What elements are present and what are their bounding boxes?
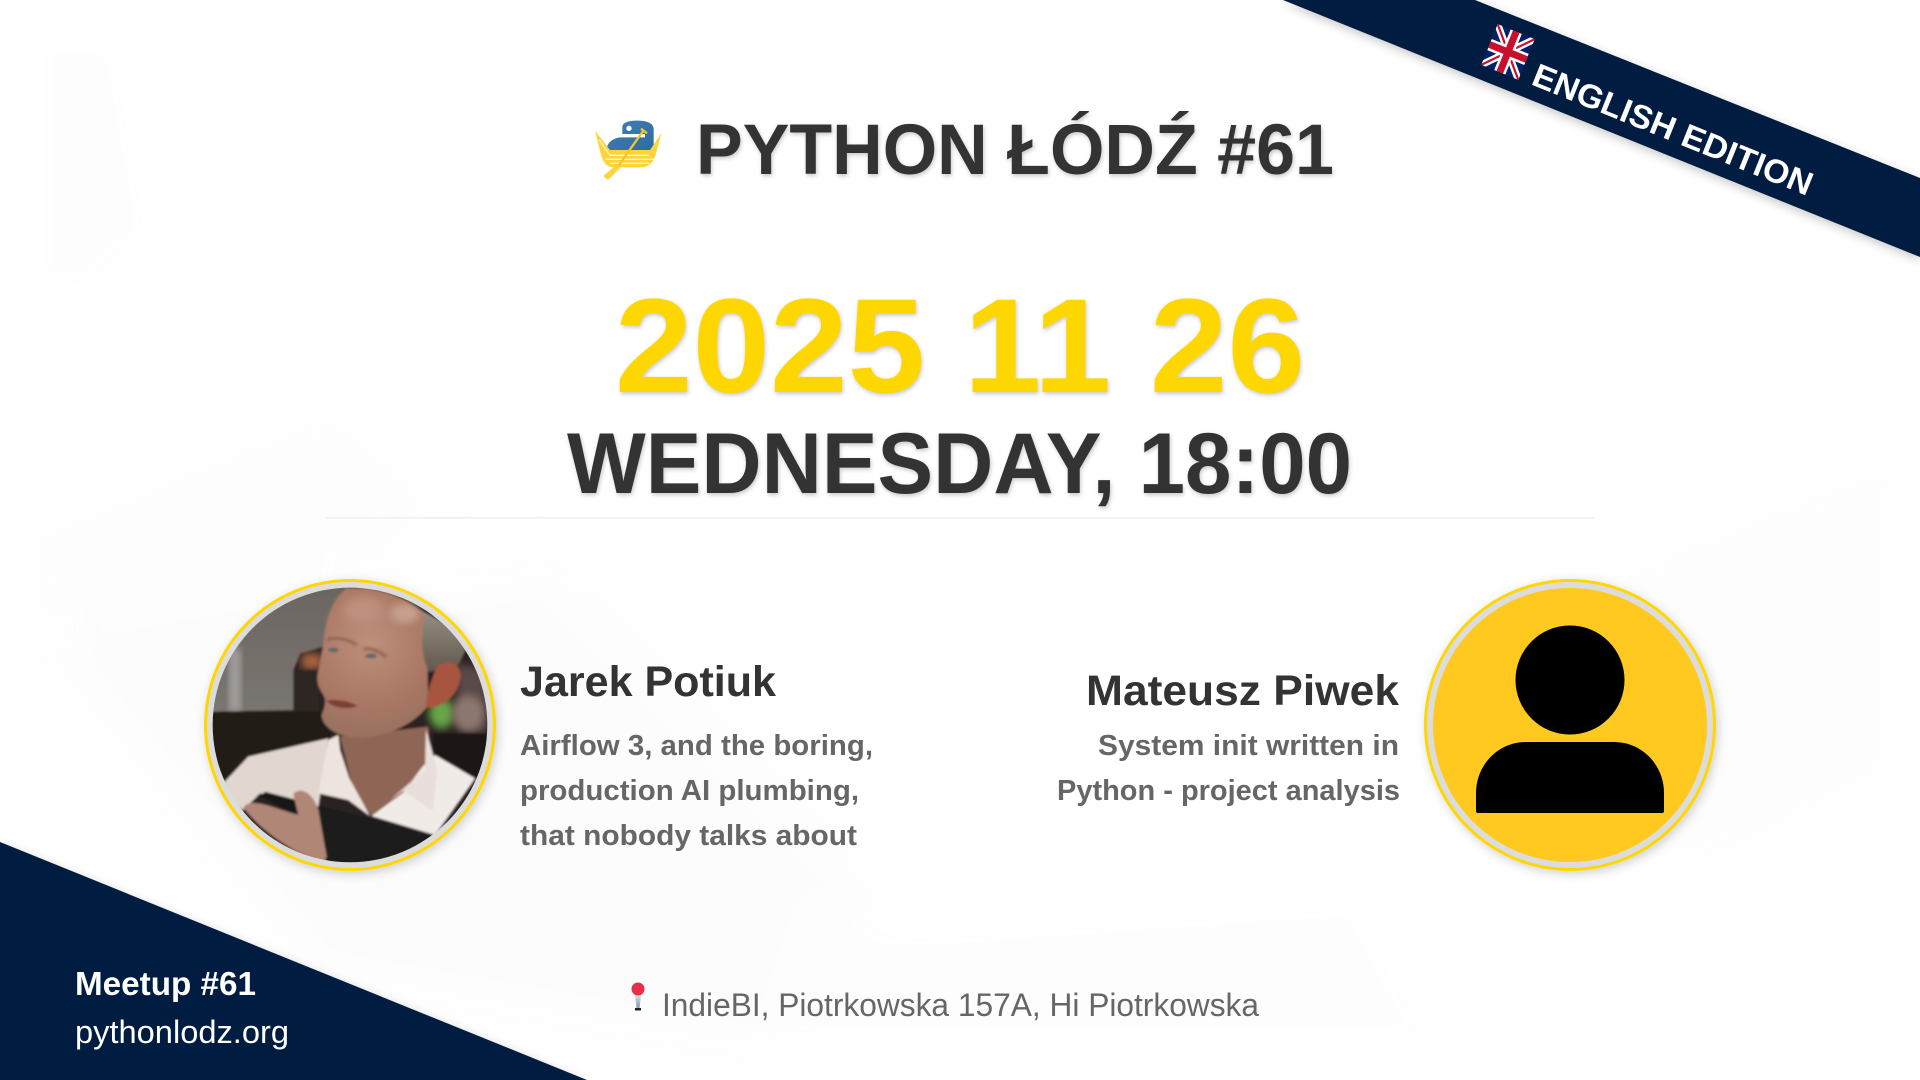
title: PYTHON ŁÓDŹ #61	[696, 111, 1334, 190]
speaker 2: talk title	[1057, 730, 1400, 807]
speaker 2: talk title: System init written in	[1098, 730, 1399, 762]
icon: UK flag	[1481, 24, 1535, 80]
day and time: WEDNESDAY, 18:00	[567, 416, 1352, 512]
speaker 1: name: Jarek Potiuk	[520, 658, 776, 706]
face	[317, 588, 428, 738]
speaker 1: talk title: that nobody talks about	[520, 820, 857, 852]
speaker 1: avatar photo	[206, 580, 494, 870]
ribbon: english edition	[1283, 0, 1920, 257]
hair	[417, 608, 465, 673]
speaker 2: talk title: Python - project analysis	[1057, 775, 1400, 807]
speaker 2: avatar placeholder	[1426, 580, 1714, 870]
shirt	[223, 738, 328, 810]
speaker 1: talk title: Airflow 3, and the boring,	[520, 730, 873, 762]
meetup number: Meetup #61	[75, 965, 256, 1002]
logo: python boat	[595, 121, 662, 180]
date: 2025 11 26	[615, 272, 1305, 421]
speaker 1: talk title: production AI plumbing,	[520, 775, 859, 807]
venue address: IndieBI, Piotrkowska 157A, Hi Piotrkowska	[662, 987, 1259, 1023]
collars	[318, 735, 370, 816]
icon: location pin	[632, 982, 644, 1010]
ear	[426, 662, 461, 707]
speaker 2: name: Mateusz Piwek	[1086, 667, 1399, 715]
website: pythonlodz.org	[75, 1014, 289, 1050]
neck	[340, 727, 430, 816]
corner: meetup info	[0, 842, 587, 1080]
speaker 1: talk title	[520, 730, 873, 852]
ribbon text: ENGLISH EDITION	[1527, 56, 1818, 202]
